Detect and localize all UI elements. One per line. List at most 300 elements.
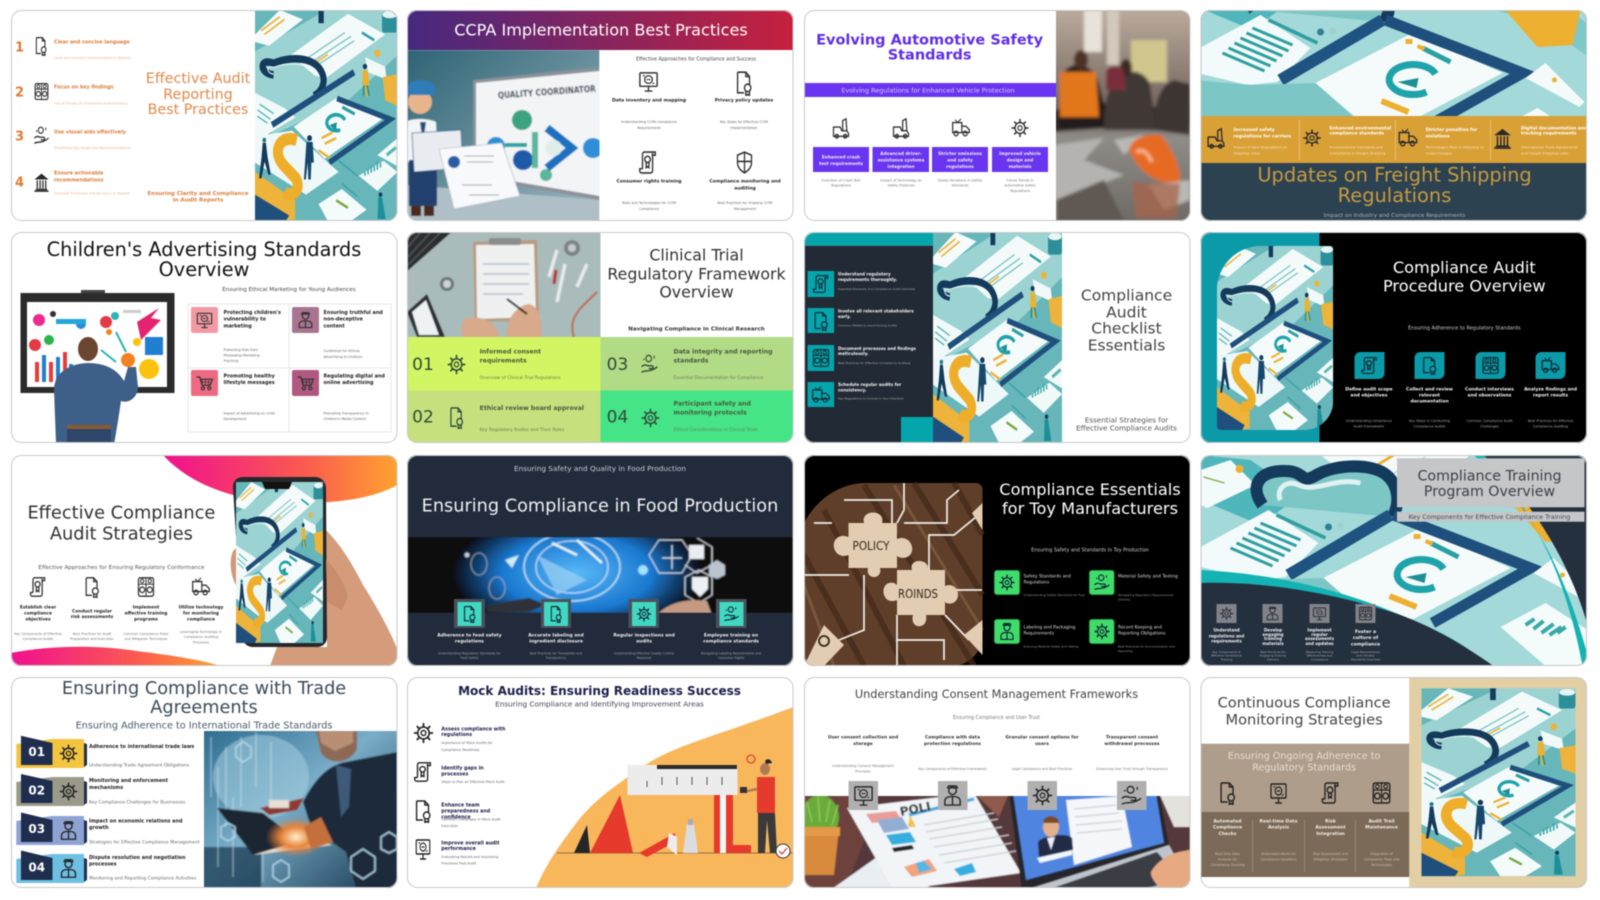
framework columns: Compliance with data xyxy=(925,735,980,741)
title: Clinical Trial xyxy=(649,246,744,265)
title xyxy=(1384,260,1546,292)
image: isometric audit illustration close-up xyxy=(1200,10,1587,117)
strategy columns: Compliance Audits xyxy=(23,637,54,641)
numbered list: Monitoring and enforcement xyxy=(89,778,169,784)
requirement columns: Global Variations in Safety xyxy=(938,178,982,182)
monitoring strategies: Technologies xyxy=(1370,863,1392,867)
title: Updates on Freight Shipping xyxy=(1257,164,1532,186)
checklist: Best Practices for Effective Compliance Auditing xyxy=(838,361,910,365)
regulation band: International Trade Agreements xyxy=(1521,145,1578,149)
training components: Standards Overview xyxy=(1351,657,1381,661)
training components xyxy=(1209,604,1381,661)
regulation band: Environmental Standards and xyxy=(1330,145,1383,149)
title: Continuous Compliance xyxy=(1218,695,1391,712)
list: reporting practices: 4 xyxy=(15,176,24,191)
numbered list: Impact on economic relations and xyxy=(89,818,183,824)
requirement columns: Improved vehicle xyxy=(999,151,1041,157)
title: Mock Audits: Ensuring Readiness Success xyxy=(458,684,741,698)
framework columns: storage xyxy=(853,741,873,747)
subtitle band xyxy=(804,83,1056,97)
requirement columns: audits xyxy=(636,638,652,644)
audit goals list: performance xyxy=(441,846,477,852)
decorative swoosh shapes xyxy=(1200,455,1588,666)
requirement columns: assistance systems xyxy=(878,158,925,164)
image: isometric audit illustration xyxy=(1216,245,1334,431)
procedure steps xyxy=(1345,352,1577,428)
training components: and updates xyxy=(1305,641,1334,646)
standards table: vulnerability to xyxy=(224,317,266,323)
title: for Toy Manufacturers xyxy=(1002,499,1178,518)
title xyxy=(1081,287,1172,355)
strategy columns: Processes xyxy=(193,640,209,644)
photo: quality coordinator with certificates: QUALITY COORDINATOR xyxy=(498,85,596,101)
panel: Clinical Trial Regulatory Framework Overview xyxy=(404,229,794,443)
regulation band: and Freight Shipping Laws xyxy=(1521,151,1568,155)
monitoring strategies: Risk xyxy=(1325,818,1337,824)
title xyxy=(1257,164,1532,207)
checklist: early. xyxy=(838,314,851,319)
procedure steps: Challenges xyxy=(1480,424,1499,428)
training components: Legal Requirements xyxy=(1351,650,1380,654)
monitoring strategies: Risk Assessment and xyxy=(1313,852,1348,856)
requirement columns: and safety xyxy=(947,158,973,164)
panel: Evolving Automotive Safety Standards xyxy=(804,5,1197,226)
list: reporting practices: 1 xyxy=(15,41,24,56)
procedure steps: Key Steps in Conducting xyxy=(1409,419,1450,423)
strategy columns: Utilize technology xyxy=(179,605,223,611)
practice grid: Compliance xyxy=(639,207,659,211)
requirement columns: Understanding Regulatory Standards for xyxy=(438,651,501,655)
monitoring strategies: Checks xyxy=(1219,831,1237,837)
monitoring strategies: Maintenance xyxy=(1365,825,1398,831)
regulation band: Compliance in Freight Shipping xyxy=(1330,151,1385,155)
standards table: Protecting children's xyxy=(224,310,281,316)
procedure steps: Compliance Auditing xyxy=(1533,424,1568,428)
audit goals list: processes xyxy=(441,772,468,778)
strategy columns: Key Components of Effective xyxy=(14,632,62,636)
procedure steps: Audit Frameworks xyxy=(1354,424,1384,428)
title: Regulations xyxy=(1338,184,1451,207)
title: Monitoring Strategies xyxy=(1225,712,1383,729)
subtitle: Impact on Industry and Compliance Requirements xyxy=(1324,213,1465,219)
strategy columns: Preparation and Execution xyxy=(70,637,114,641)
numbered list: growth xyxy=(89,825,109,831)
illustration: measuring tools and auditor xyxy=(557,755,794,858)
title xyxy=(999,480,1181,518)
list: reporting practices: Clear and concise language xyxy=(54,39,130,45)
requirement columns: test requirements xyxy=(819,161,863,167)
regulation band: Shipping Costs xyxy=(1234,151,1260,155)
essentials grid: Regulations xyxy=(1024,579,1050,585)
subtitle: Ensuring Clarity and Compliance xyxy=(148,191,249,197)
requirement columns xyxy=(437,599,761,660)
subtitle: Effective Compliance Audits xyxy=(1076,424,1177,433)
framework quadrants: Overview of Clinical Trial Regulations xyxy=(480,375,561,381)
procedure steps: Collect and review xyxy=(1406,387,1453,393)
practice grid: Management xyxy=(734,207,757,211)
standards table: Regulating digital and xyxy=(324,373,385,379)
panel: Children's Advertising Standards Overview xyxy=(11,232,398,451)
photo: training room with orange bag xyxy=(1055,10,1191,222)
essentials grid: Requirements xyxy=(1024,631,1055,637)
list: reporting practices: 2 xyxy=(15,86,24,101)
strategy columns: risk assessments xyxy=(71,614,114,620)
training components: Effective Compliance xyxy=(1211,654,1242,658)
practice grid: Data inventory and mapping xyxy=(612,98,686,104)
procedure steps: Define audit scope xyxy=(1345,387,1393,393)
requirement columns: Consumer Rights xyxy=(718,656,745,660)
audit goals list: Steps to Plan an Effective Mock Audit xyxy=(441,780,505,784)
subtitle: Ensuring Ethical Marketing for Young Audiences xyxy=(222,287,356,293)
framework quadrants: Participant safety and xyxy=(674,400,751,408)
audit goals list: Processes Post-Audit xyxy=(441,862,477,866)
framework columns: Key Components of Effective Frameworks xyxy=(918,767,987,771)
regulation band: regulations for carriers xyxy=(1234,133,1291,139)
photo: digital compliance hologram xyxy=(404,511,797,635)
panel: Compliance Training Program Overview xyxy=(1200,455,1600,755)
standards table: Promoting Transparency in xyxy=(324,412,369,416)
monitoring strategies xyxy=(1200,812,1409,877)
title: Evolving Automotive Safety xyxy=(816,32,1044,48)
training components: Delivery xyxy=(1267,657,1279,661)
subtitle: Ensuring Adherence to International Trade Standards xyxy=(76,720,332,732)
framework columns: Principles xyxy=(855,769,871,773)
title: Agreements xyxy=(150,698,258,718)
audit goals list: confidence xyxy=(441,815,471,821)
image: isometric audit illustration xyxy=(255,10,398,221)
framework columns xyxy=(828,735,1168,810)
monitoring strategies: Compliance Violations xyxy=(1260,857,1297,861)
requirement columns: compliance standards xyxy=(703,638,759,644)
title: Children's Advertising Standards xyxy=(47,238,361,261)
checklist: meticulously. xyxy=(838,351,869,356)
practice grid xyxy=(612,72,781,211)
title xyxy=(1218,695,1391,729)
numbered list: 02 xyxy=(28,783,45,797)
checklist: consistency. xyxy=(838,388,867,392)
essentials grid: Ensuring Material Safety and Testing xyxy=(1024,644,1079,648)
standards table: Guidelines for Ethical xyxy=(324,349,360,353)
framework columns: users xyxy=(1035,741,1049,747)
standards table: Protecting Kids from xyxy=(224,348,259,352)
title: Ensuring Compliance in Food Production xyxy=(422,496,778,516)
title box: Compliance Training xyxy=(1418,468,1562,484)
requirement columns: Employee training on xyxy=(704,632,758,638)
strategy columns: Common Compliance Risks xyxy=(124,632,169,636)
numbered list: Dispute resolution and negotiation xyxy=(89,855,186,861)
procedure steps: relevant xyxy=(1419,393,1441,399)
essentials grid: Reporting xyxy=(1118,649,1133,653)
title: Overview xyxy=(159,258,249,281)
title bar xyxy=(407,10,794,50)
title: Effective Audit xyxy=(146,71,251,87)
title: Reporting xyxy=(163,87,233,103)
standards table: online advertising xyxy=(324,380,374,386)
training components: Compliance xyxy=(1311,657,1328,661)
list: reporting practices: Focus on key findings xyxy=(54,84,114,90)
strategy columns: Best Practices for Audit xyxy=(73,632,112,636)
requirement columns: Navigating Labeling Requirements and xyxy=(701,651,761,655)
requirement columns: design and xyxy=(1007,158,1033,164)
regulation band: Technology's Role in Adapting to xyxy=(1424,145,1484,149)
procedure steps: Analyze findings and xyxy=(1524,387,1577,393)
standards table xyxy=(188,304,391,432)
title: Understanding Consent Management Frameworks xyxy=(855,688,1138,701)
requirement columns: Enhanced crash xyxy=(822,154,860,160)
framework quadrants: Informed consent xyxy=(480,348,541,356)
monitoring strategies: Integration of xyxy=(1370,852,1394,856)
decorative gradient shapes xyxy=(11,455,398,666)
standards table: non-deceptive xyxy=(324,317,364,323)
requirement columns: Evolution of Crash Test xyxy=(822,178,861,182)
requirement columns: Accurate labeling and xyxy=(528,632,584,638)
standards table: lifestyle messages xyxy=(224,380,275,386)
subtitle: Effective Approaches for Ensuring Regulatory Conformance xyxy=(38,565,205,571)
framework columns: withdrawal processes xyxy=(1104,741,1160,747)
training components: materials xyxy=(1262,641,1284,646)
left dark sidebar xyxy=(804,232,933,443)
training components: Key Components of xyxy=(1212,650,1242,654)
standards table: Development xyxy=(224,417,247,421)
checklist: Schedule regular audits for xyxy=(838,382,901,387)
framework quadrants: 03 xyxy=(607,355,628,375)
framework columns: Granular consent options for xyxy=(1005,735,1079,741)
monitoring strategies: Compliance Tracking xyxy=(1210,863,1245,867)
strategy columns: compliance xyxy=(24,611,52,617)
panel: Compliance Audit Procedure Overview xyxy=(1200,232,1587,443)
procedure steps: Understanding Compliance xyxy=(1346,419,1392,423)
requirement columns: Regulations xyxy=(1010,189,1030,193)
requirement columns: Future Trends in xyxy=(1006,178,1034,182)
essentials grid: Navigating Regulatory Requirements xyxy=(1118,593,1174,597)
strategy columns: effective training xyxy=(125,611,167,617)
practice grid: Compliance monitoring and xyxy=(709,179,781,185)
framework quadrants: Ethical review board approval xyxy=(480,405,584,412)
audit goals list: Execution xyxy=(441,824,458,828)
standards table: content xyxy=(324,323,345,329)
subtitle xyxy=(148,191,249,204)
training components: Understand xyxy=(1213,628,1240,633)
framework columns: Legal Compliance and Best Practices xyxy=(1012,767,1073,771)
requirement columns: Safety Protocols xyxy=(887,184,915,188)
framework quadrants: Ethical Considerations in Clinical Trials xyxy=(674,427,758,433)
subtitle: in Audit Reports xyxy=(173,198,224,204)
checklist: Key Regulations to Include in Your Checklist xyxy=(838,396,904,400)
requirement columns: Advanced driver- xyxy=(880,151,922,157)
audit goals list xyxy=(414,723,506,866)
strategy columns: Conduct regular xyxy=(72,608,113,614)
list: reporting practices: Prioritizing Key Issues and Recommendations xyxy=(54,146,131,150)
numbered list: mechanisms xyxy=(89,785,123,791)
requirement columns: ingredient disclosure xyxy=(529,638,583,644)
audit goals list: regulations xyxy=(441,732,472,738)
subtitle xyxy=(1076,415,1177,433)
training components: regular xyxy=(1311,632,1328,637)
standards table: Impact of Advertising on Child xyxy=(224,412,275,416)
standards table: marketing xyxy=(224,323,252,329)
training components: Measuring Training xyxy=(1306,650,1333,654)
framework columns: protection regulations xyxy=(924,741,981,747)
image: isometric audit illustration xyxy=(933,232,1062,443)
image: isometric audit illustration close-up xyxy=(1200,455,1600,755)
standards table: Ensuring truthful and xyxy=(324,310,383,316)
photo: puzzle pieces on wood: ROINDS xyxy=(898,587,938,601)
essentials grid: Labeling and Packaging xyxy=(1024,625,1076,631)
regulation band xyxy=(1200,116,1587,163)
title box: Program Overview xyxy=(1424,484,1555,500)
checklist: Involve all relevant stakeholders xyxy=(838,308,914,314)
essentials grid: Record Keeping and xyxy=(1118,625,1162,631)
title: Compliance Essentials xyxy=(999,480,1181,499)
standards table: Promoting healthy xyxy=(224,373,276,379)
regulation band: tracking requirements xyxy=(1521,131,1577,137)
photo: puzzle pieces on wood xyxy=(804,483,982,666)
strategy columns: programs xyxy=(134,617,158,623)
standards table: Children's Media Content xyxy=(324,417,367,421)
photo: businessman with laptop and ship xyxy=(201,727,401,892)
regulation band: Enhanced environmental xyxy=(1330,126,1392,132)
training components: Develop xyxy=(1264,627,1282,632)
procedure steps: and objectives xyxy=(1350,393,1388,399)
requirement columns xyxy=(813,119,1048,193)
numbered list: Adherence to international trade laws xyxy=(89,744,194,750)
subtitle box: Key Components for Effective Compliance Training xyxy=(1409,513,1570,521)
photo: puzzle pieces on wood: POLICY xyxy=(852,539,890,553)
list: reporting practices xyxy=(15,38,131,195)
training components: compliance xyxy=(1351,641,1380,647)
training components: requirements xyxy=(1211,639,1242,644)
title bar: CCPA Implementation Best Practices xyxy=(454,21,748,40)
framework quadrants: monitoring protocols xyxy=(674,410,747,416)
panel: Updates on Freight Shipping Regulations xyxy=(1200,10,1588,222)
practice grid: Tools and Technologies for CCPA xyxy=(621,201,677,205)
regulation band: Increased safety xyxy=(1234,127,1275,133)
framework quadrants: Data integrity and reporting xyxy=(674,348,773,356)
audit goals list: Compliance Readiness xyxy=(441,748,480,752)
framework quadrants: 04 xyxy=(607,408,628,428)
list: reporting practices: recommendations xyxy=(54,178,104,184)
strategy columns: for monitoring xyxy=(183,611,219,617)
strategy columns xyxy=(14,578,223,644)
strategy columns: Leveraging Technology in xyxy=(180,630,222,634)
framework columns: Understanding Consent Management xyxy=(832,764,895,768)
requirement columns: integration xyxy=(887,164,915,170)
essentials grid: Reporting Obligations xyxy=(1118,631,1166,637)
title: Audit xyxy=(1106,304,1147,322)
subtitle: Ensuring Safety and Standards in Toy Production xyxy=(1031,548,1149,554)
essentials grid: Safety Standards and xyxy=(1024,573,1071,579)
photo: policy documents and laptop on desk xyxy=(801,793,1194,891)
list: reporting practices: Ensuring Timeliness and Accuracy in Reports xyxy=(54,191,130,195)
requirement columns: Food Safety xyxy=(460,656,479,660)
title: Effective Compliance xyxy=(27,502,215,523)
training components: Implement xyxy=(1307,627,1332,632)
title xyxy=(146,71,251,118)
panel: Compliance Audit Checklist Essentials xyxy=(804,232,1190,443)
requirement columns: materials xyxy=(1009,164,1032,170)
training components: and Industry xyxy=(1356,654,1375,658)
subtitle: Effective Approaches for Compliance and Success xyxy=(636,56,756,62)
title: Audit Strategies xyxy=(50,523,193,544)
left teal column xyxy=(1200,232,1320,443)
title: Compliance xyxy=(1081,287,1172,305)
essentials grid: Best Practices for Documentation and xyxy=(1118,644,1175,648)
monitoring strategies: Analysis for xyxy=(1218,857,1238,861)
strategy columns: and Mitigation Techniques xyxy=(124,637,168,641)
subtitle band: Regulatory Standards xyxy=(1252,762,1356,774)
requirement columns: Best Practices for Traceability and xyxy=(530,651,582,655)
numbered list: processes xyxy=(89,861,117,867)
monitoring strategies: Integration xyxy=(1316,831,1345,837)
audit goals list: Enhance team xyxy=(441,803,480,809)
training components: engaging xyxy=(1262,632,1284,637)
requirement columns: Transparency xyxy=(545,656,566,660)
checklist: Understand regulatory xyxy=(838,272,891,276)
numbered list: 01 xyxy=(28,745,45,759)
title: Checklist xyxy=(1091,320,1162,338)
strategy columns: Implement xyxy=(133,605,159,611)
title: Compliance Audit xyxy=(1393,258,1536,277)
practice grid: Consumer rights training xyxy=(616,179,682,185)
procedure steps: report results xyxy=(1533,393,1568,399)
subtitle band: Evolving Regulations for Enhanced Vehicle Protection xyxy=(841,86,1015,94)
title xyxy=(816,32,1044,63)
strategy columns: compliance xyxy=(187,617,215,623)
regulation band: Impact of New Regulations on xyxy=(1234,145,1287,149)
regulation band: compliance standards xyxy=(1330,131,1384,137)
practice grid: auditing xyxy=(734,185,756,191)
subtitle: Ensuring Compliance and User Trust xyxy=(953,715,1040,721)
numbered list: Key Compliance Challenges for Businesses xyxy=(89,800,186,806)
training components: Best Practices for xyxy=(1260,650,1286,654)
panel: Understanding Consent Management Frameworks xyxy=(801,677,1194,891)
monitoring strategies: Assessment xyxy=(1315,825,1347,831)
framework quadrants: standards xyxy=(674,357,709,364)
audit goals list: Common Challenges in Mock Audit xyxy=(441,818,501,822)
right tan column xyxy=(1409,677,1587,888)
title: Essentials xyxy=(1088,337,1165,355)
monitoring strategies: Real-time Data xyxy=(1215,852,1240,856)
regulation band: Digital documentation and xyxy=(1521,126,1587,132)
essentials grid xyxy=(994,570,1178,653)
list: reporting practices: Ensure actionable xyxy=(54,171,104,177)
checklist: requirements thoroughly. xyxy=(838,277,898,282)
title xyxy=(62,679,346,718)
monitoring strategies: Real-time Data xyxy=(1260,818,1297,824)
title: Best Practices xyxy=(148,102,248,118)
framework columns: Transparent consent xyxy=(1106,735,1159,741)
requirement columns: Automotive Safety xyxy=(1004,184,1036,188)
requirement columns: Regular inspections and xyxy=(613,632,675,638)
title: Procedure Overview xyxy=(1383,276,1546,296)
practice grid: Privacy policy updates xyxy=(715,98,774,104)
strategy columns: Establish clear xyxy=(20,605,57,611)
monitoring strategies: Compliance Tools and xyxy=(1364,857,1399,861)
requirement columns: Regulations xyxy=(831,184,851,188)
subtitle band: Ensuring Ongoing Adherence to xyxy=(1228,751,1381,762)
panel: Compliance Essentials for Toy Manufacturers xyxy=(804,455,1190,666)
subtitle: Ensuring Safety and Quality in Food Production xyxy=(514,464,686,473)
procedure steps: and observations xyxy=(1468,393,1512,399)
training components: regulations and xyxy=(1209,633,1244,638)
procedure steps: Compliance Audits xyxy=(1414,424,1446,428)
standards table: Misleading Marketing xyxy=(224,354,260,358)
panel: Continuous Compliance Monitoring Strategies xyxy=(1200,677,1587,888)
title: Overview xyxy=(659,283,734,302)
essentials grid: Material Safety and Testing xyxy=(1118,573,1178,579)
numbered list: 04 xyxy=(28,860,45,874)
list: reporting practices: Clear and Concise Communication in Reports xyxy=(54,56,131,60)
